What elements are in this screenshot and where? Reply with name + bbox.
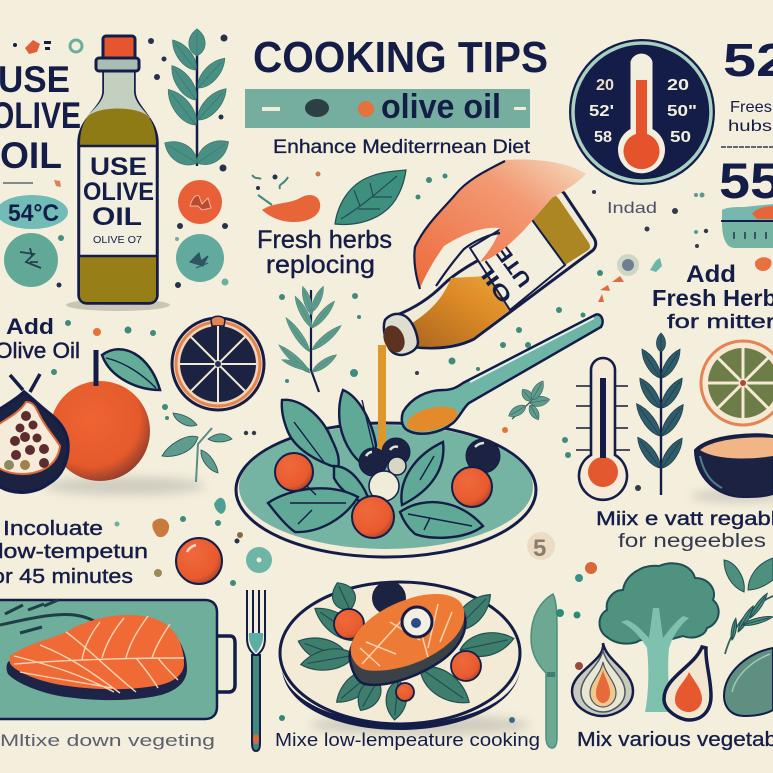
tomatoes — [275, 453, 492, 538]
subtitle: Enhance Mediterrnean Diet — [273, 137, 531, 158]
sprig right — [632, 333, 688, 495]
bottle label: UTE — [491, 241, 536, 291]
bottle mouth — [379, 314, 418, 356]
greens under salmon — [294, 578, 516, 721]
small teal dish — [721, 204, 773, 248]
text: add fresh herbs: for mitter — [667, 312, 773, 333]
text: mix vegetables — [596, 509, 773, 552]
text: add fresh herbs: Add — [686, 261, 736, 288]
cut fig — [0, 374, 68, 492]
text: fresh hubs: Frees — [730, 99, 772, 116]
text: fresh hubs: hubs — [728, 118, 772, 135]
bottom-left caption: Mltixe down vegeting — [0, 731, 215, 750]
sprig top — [160, 29, 234, 171]
thermometer dial: 52' — [589, 103, 614, 120]
right stat 52: 52 — [723, 34, 773, 86]
citrus slice right — [701, 341, 773, 425]
small orange — [176, 538, 222, 584]
temperature pill — [0, 195, 68, 229]
thermometer dial: 50" — [667, 103, 697, 120]
left heading: use olive oil: USE — [0, 59, 70, 100]
salmon steak — [350, 599, 465, 685]
small herb right of spoon — [506, 379, 551, 422]
small decorative marks top left — [3, 40, 82, 187]
text: fresh herbs: replocing — [266, 251, 375, 279]
text: add fresh herbs: Fresh Herb — [652, 285, 773, 311]
bottle label: USE — [90, 153, 147, 181]
thermometer small — [576, 358, 630, 500]
text: incubate for 45 minutes: low-tempetun — [0, 541, 148, 563]
temperature pill: 54°C — [8, 200, 59, 227]
mid specks near small orange — [114, 498, 597, 586]
banner: olive oil: olive oil — [381, 88, 501, 126]
text: indad: Indad — [607, 200, 657, 217]
cut fig bottom — [664, 647, 711, 720]
pouring bottle — [379, 190, 596, 356]
bottle label: OIL — [92, 203, 142, 231]
mozzarella — [369, 457, 406, 501]
bottle: use olive oil — [66, 36, 170, 311]
bottle label — [470, 213, 565, 310]
herb on board — [0, 600, 102, 633]
speck group right — [592, 190, 772, 302]
text: add olive oil: Add — [6, 314, 54, 339]
olives — [359, 438, 500, 476]
thermometer dial: 20 — [667, 77, 689, 94]
broccoli — [600, 563, 719, 712]
text: add fresh herbs — [652, 261, 773, 333]
knife — [531, 594, 557, 748]
pouring hand — [414, 160, 586, 289]
banner: olive oil — [245, 88, 530, 128]
bottle label: OLIVE — [83, 178, 154, 206]
plate with salad — [236, 345, 536, 557]
scattered dots around bottle — [56, 34, 228, 288]
cutting board with salmon — [0, 600, 235, 719]
bottle label: OIL — [472, 257, 517, 307]
teal circle right of bottle — [176, 234, 224, 282]
spoon — [402, 314, 603, 436]
left heading: use olive oil — [0, 59, 81, 176]
dashed divider and stat 55: 55 — [719, 153, 773, 209]
olive — [372, 581, 406, 615]
thermometer dial — [569, 39, 715, 185]
text: fresh herbs — [257, 226, 392, 279]
avocado — [724, 648, 773, 716]
bottle label — [79, 146, 157, 256]
orange with stem and leaf — [50, 349, 160, 481]
large leaf — [335, 170, 406, 224]
mid specks near small orange: 5 — [533, 535, 546, 562]
left heading: use olive oil: OIL — [0, 135, 62, 176]
small tomatoes — [334, 609, 481, 701]
small herb lower left — [162, 413, 232, 482]
text: mix vegetables: for negeebles — [618, 531, 766, 552]
title: COOKING TIPS — [253, 33, 548, 82]
text: incubate for 45 minutes: Incoluate — [3, 518, 103, 540]
scattered specks center — [51, 174, 641, 723]
text: fresh herbs: Fresh herbs — [257, 226, 392, 254]
orange splash with teal specks — [252, 172, 320, 222]
herb leaves right of broccoli — [724, 558, 773, 654]
oil stream — [378, 345, 386, 450]
bottle label: OLIVE O7 — [93, 235, 142, 246]
bowl — [695, 434, 773, 497]
text: incubate for 45 minutes — [0, 518, 148, 588]
teal circle left — [4, 233, 58, 287]
thermometer dial: 20 — [596, 77, 614, 94]
text: mix vegetables: Miix e vatt regabl — [596, 509, 773, 530]
caption right: Mix various vegetab — [577, 729, 773, 751]
orange circle right of bottle — [178, 180, 222, 224]
half dark citrus — [172, 316, 264, 410]
salmon fillet — [6, 615, 187, 700]
text: add olive oil — [0, 314, 80, 363]
thermometer dial: 58 — [594, 129, 612, 146]
salmon plate — [280, 578, 520, 730]
caption center: Mixe low-lempeature cooking — [275, 730, 540, 750]
herb sprig center — [276, 285, 343, 392]
text: fresh hubs — [728, 99, 772, 135]
thermometer dial: 50 — [670, 129, 691, 146]
salad leaves — [268, 390, 483, 538]
fork — [247, 590, 265, 751]
onion — [572, 643, 633, 716]
